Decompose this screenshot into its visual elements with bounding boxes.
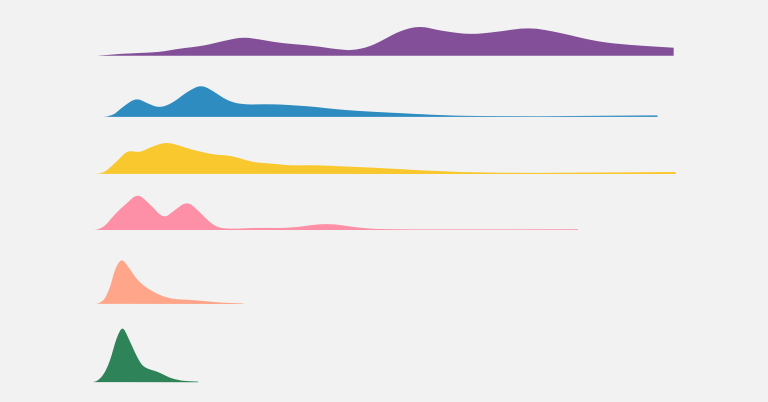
ridge: green xyxy=(93,329,198,382)
ridge: purple xyxy=(97,27,674,56)
ridge: pink xyxy=(94,196,578,230)
ridge: salmon xyxy=(96,260,243,304)
ridge: yellow xyxy=(96,143,676,174)
ridge: blue xyxy=(103,86,657,117)
